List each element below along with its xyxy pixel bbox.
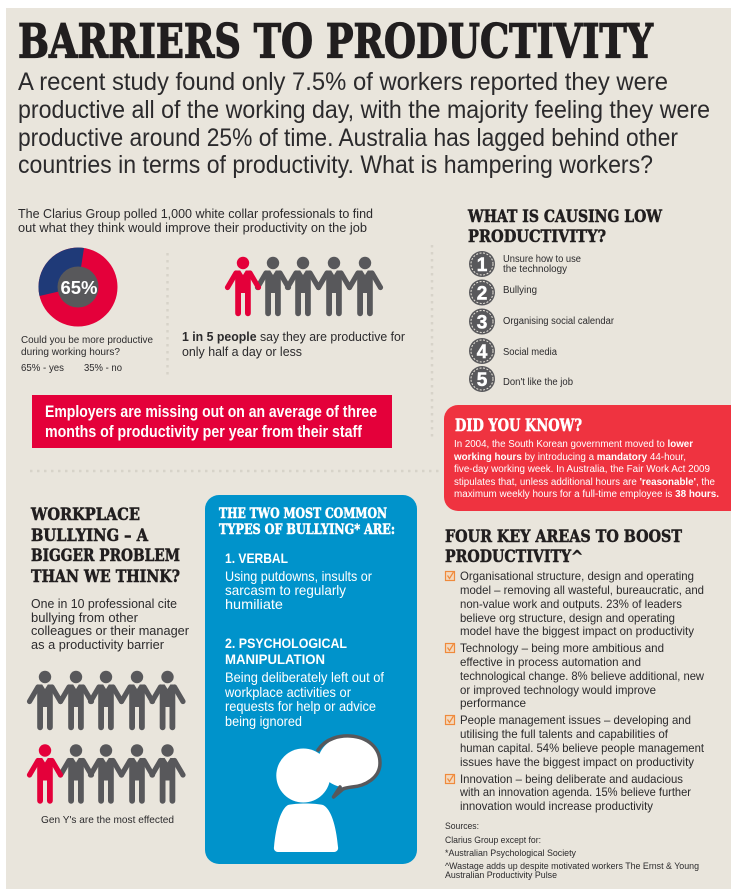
list: people management: human capital. 54% believe people management: [460, 741, 705, 755]
numbered list of causes: the technology: [503, 264, 567, 275]
heading: four key areas: PRODUCTIVITY^: [445, 547, 583, 567]
numbered list of causes: 1: [477, 255, 488, 276]
panel: did you know: working hours by introducing a mandatory 44-hour,: [453, 452, 686, 463]
list: innovation: with an innovation agenda. 15% believe further: [459, 785, 691, 799]
heading: four key areas: FOUR KEY AREAS TO BOOST: [445, 527, 682, 547]
list: organisational structure: model – removing all wasteful, bureaucratic, and: [460, 583, 704, 597]
poll intro text: [18, 207, 373, 235]
panel: did you know: In 2004, the South Korean government moved to lower: [454, 439, 693, 450]
list: organisational structure: believe org structure, design and operating: [460, 611, 675, 625]
icon: five grey people: [30, 671, 183, 730]
icon: person with speech bubble: [274, 736, 380, 852]
numbered list of causes: [469, 251, 615, 392]
verbal bullying: [225, 550, 372, 612]
bullying statistic text: [31, 596, 190, 652]
list: technology: effective in process automation and: [460, 655, 641, 669]
heading: what is causing low productivity: PRODUCTIVITY?: [468, 227, 606, 246]
verbal bullying: Using putdowns, insults or: [225, 568, 372, 584]
numbered list of causes: Don't like the job: [503, 377, 573, 388]
donut caption: 35% - no: [84, 362, 122, 374]
psychological manipulation: 2. PSYCHOLOGICAL: [225, 635, 347, 651]
numbered list of causes: Bullying: [503, 285, 537, 296]
1 in 5 people statement: [182, 329, 406, 359]
sources: Sources:: [445, 821, 479, 832]
heading: workplace bullying: BULLYING – A: [31, 526, 148, 545]
panel: did you know: stipulates that, unless additional hours are 'reasonable', the: [454, 477, 715, 488]
bullying statistic text: colleagues or their manager: [31, 623, 190, 638]
list: technology: technological change. 8% believe additional, new: [460, 669, 704, 683]
list: people management: issues have the biggest impact on productivity: [460, 755, 694, 769]
list: people management: utilising the full talents and capabilities of: [460, 727, 669, 741]
callout: employers missing out: months of productivity per year from their staff: [45, 423, 362, 441]
list: innovation: Innovation – being deliberate and audacious: [460, 772, 683, 786]
list: organisational structure: model have the biggest impact on productivity: [460, 624, 694, 638]
psychological manipulation: [224, 635, 384, 729]
intro text: countries in terms of productivity. What is hampering workers?: [18, 151, 653, 179]
icon: five people, one red: [228, 257, 380, 316]
list: people management: People management issues – developing and: [460, 713, 691, 727]
donut chart: 65% yes: 65%: [60, 277, 98, 298]
icon: check box: [446, 644, 454, 652]
verbal bullying: 1. VERBAL: [225, 550, 288, 566]
panel: did you know: [444, 405, 731, 511]
list: innovation: innovation would increase productivity: [460, 799, 653, 813]
numbered list of causes: Social media: [503, 347, 557, 358]
list: technology: [446, 641, 704, 710]
heading: workplace bullying: BIGGER PROBLEM: [31, 546, 180, 565]
donut caption: Could you be more productive: [21, 334, 153, 346]
panel heading: [219, 506, 395, 538]
list: organisational structure: Organisational structure, design and operating: [460, 569, 694, 583]
bullying statistic text: as a productivity barrier: [31, 637, 165, 652]
callout: employers missing out: Employers are missing out on an average of three: [45, 403, 377, 421]
callout: employers missing out: [32, 395, 392, 448]
list: innovation: [446, 772, 691, 813]
panel: types of bullying: [205, 495, 417, 864]
numbered list of causes: 4: [477, 342, 488, 363]
panel: did you know: maximum weekly hours for a full-time employee is 38 hours.: [454, 489, 719, 500]
psychological manipulation: requests for help or advice: [225, 698, 376, 714]
icon: check box: [446, 774, 454, 784]
intro text: A recent study found only 7.5% of workers reported they were: [18, 68, 668, 96]
poll intro text: The Clarius Group polled 1,000 white collar professionals to find: [18, 207, 373, 221]
intro text: productive around 25% of time. Australia has lagged behind other: [18, 124, 678, 152]
donut chart: 65% yes: [38, 248, 117, 326]
heading: workplace bullying: WORKPLACE: [30, 505, 140, 524]
panel: did you know: five-day working week. In Australia, the Fair Work Act 2009: [454, 464, 710, 475]
verbal bullying: sarcasm to regularly: [225, 582, 346, 598]
numbered list of causes: 3: [477, 312, 487, 334]
psychological manipulation: Being deliberately left out of: [225, 669, 384, 685]
heading: four key areas: [445, 527, 682, 567]
psychological manipulation: being ignored: [225, 713, 302, 729]
sources: [445, 821, 699, 881]
sources: *Australian Psychological Society: [445, 848, 576, 859]
list: technology: performance: [460, 696, 526, 710]
intro text: [18, 68, 710, 179]
numbered list of causes: 2: [477, 284, 487, 304]
sources: Australian Productivity Pulse: [445, 870, 557, 881]
icon: check box: [446, 716, 454, 724]
psychological manipulation: MANIPULATION: [225, 651, 325, 667]
1 in 5 people statement: 1 in 5 people say they are productive for: [182, 329, 406, 344]
numbered list of causes: Organising social calendar: [503, 316, 615, 327]
heading: workplace bullying: THAN WE THINK?: [31, 567, 180, 586]
icon: five people, one red: [30, 744, 183, 804]
panel: did you know: DID YOU KNOW?: [455, 416, 582, 435]
bullying statistic text: bullying from other: [31, 610, 139, 625]
heading: what is causing low productivity: [467, 207, 662, 246]
list: people management: [446, 713, 705, 769]
verbal bullying: humiliate: [225, 596, 283, 612]
panel heading: THE TWO MOST COMMON: [219, 506, 387, 522]
list: organisational structure: non-value work and outputs. 23% of leaders: [460, 597, 682, 611]
donut caption: 65% - yes: [21, 362, 64, 374]
poll intro text: out what they think would improve their productivity on the job: [18, 221, 367, 235]
caption: gen y: Gen Y's are the most effected: [41, 814, 174, 826]
numbered list of causes: 5: [477, 370, 488, 391]
sources: ^Wastage adds up despite motivated workers The Ernst & Young: [445, 861, 699, 872]
donut caption: [21, 334, 153, 374]
panel heading: TYPES OF BULLYING* ARE:: [219, 522, 395, 538]
heading: workplace bullying: [30, 505, 180, 586]
psychological manipulation: workplace activities or: [224, 684, 351, 700]
numbered list of causes: Unsure how to use: [503, 254, 581, 265]
donut caption: during working hours?: [21, 346, 120, 358]
heading: what is causing low productivity: WHAT IS CAUSING LOW: [467, 207, 662, 226]
1 in 5 people statement: only half a day or less: [182, 344, 302, 359]
list: organisational structure: [446, 569, 704, 638]
icon: check box: [446, 572, 454, 580]
sources: Clarius Group except for:: [445, 835, 541, 846]
bullying statistic text: One in 10 professional cite: [31, 596, 177, 611]
list: technology: or improved technology would improve: [460, 683, 656, 697]
list: technology: Technology – being more ambitious and: [460, 641, 664, 655]
